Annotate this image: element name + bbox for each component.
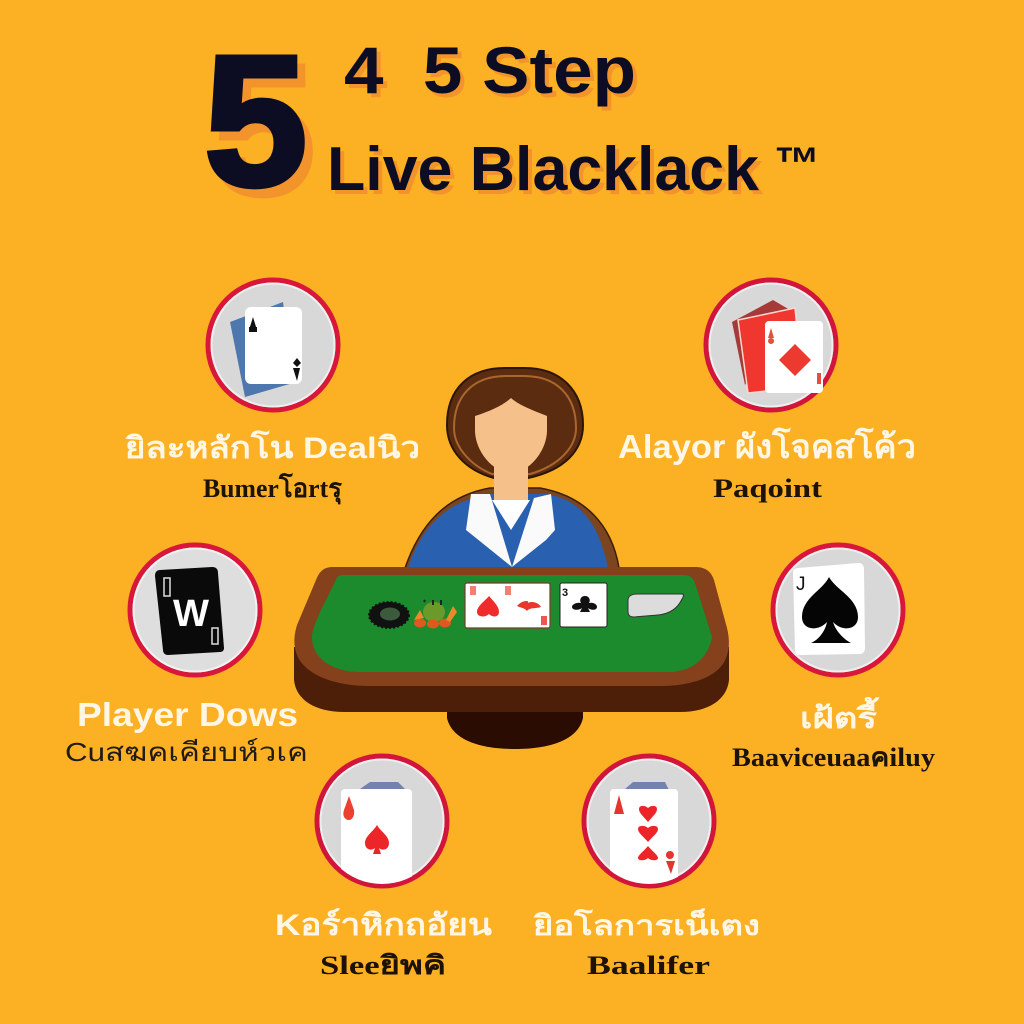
label: stand heading: Kอร์าหิกถอัยน <box>275 908 493 942</box>
two red cards <box>465 583 550 628</box>
hair <box>447 368 583 478</box>
white collar left <box>466 494 512 567</box>
white card <box>793 563 865 655</box>
step icon: hearts card <box>584 756 714 889</box>
letter J: J <box>796 574 806 595</box>
suit marks <box>249 317 301 381</box>
white glyph: W <box>173 593 209 635</box>
table top <box>294 567 729 686</box>
trademark mark: ™ <box>774 137 820 189</box>
step icon: black card <box>130 545 260 675</box>
label: dealer heading: ยิละหลักโน Dealนิว <box>125 429 420 465</box>
step icon: dealer cards <box>208 280 338 410</box>
label: draw heading: Player Dows <box>77 696 298 733</box>
corner marks <box>164 578 218 644</box>
title line: 4 5 Step: 4 5 Step <box>348 37 640 111</box>
label: bust sub text: Baaviceuaaคiluy <box>732 743 935 772</box>
title <box>204 18 820 234</box>
green felt <box>312 575 712 672</box>
neck <box>494 465 528 502</box>
label: player heading: Alayor ผังโจคสโค้ว <box>618 427 916 465</box>
back card <box>360 782 405 789</box>
card shoe <box>628 594 684 617</box>
diamond <box>779 344 811 376</box>
table side <box>294 647 729 712</box>
club card: 3 <box>562 587 568 599</box>
step icon: spade card <box>773 545 903 675</box>
dealer figure <box>405 368 619 568</box>
chair back <box>405 488 619 568</box>
black card body <box>155 567 224 655</box>
label: dealer sub text: Bumerโอrtรุ <box>203 472 342 505</box>
face <box>475 398 547 473</box>
label: draw sub text: Cuสฆคเคียบห์วเค <box>65 737 308 767</box>
chip stack <box>369 602 409 628</box>
label: payout sub text: Baalifer <box>587 951 710 980</box>
back card <box>625 782 668 789</box>
fruit-like chip pile <box>414 600 457 628</box>
big number 5: 5 <box>212 27 315 234</box>
corner marks <box>614 795 675 874</box>
three hearts <box>638 806 658 860</box>
step icon: red suit card <box>317 756 447 889</box>
red suit <box>365 825 389 854</box>
label: stand sub text: Sleeยิพคิ <box>320 951 446 980</box>
big number 5: 5 <box>204 18 307 225</box>
label: bust heading: เฝ้ตรี้ <box>800 696 880 735</box>
shirt <box>492 500 530 530</box>
title line: Live Blacklack: Live Blacklack <box>331 139 764 208</box>
label: player sub text: Paqoint <box>713 474 822 503</box>
white card <box>610 789 678 889</box>
blue card back <box>230 302 293 397</box>
corner marks <box>768 328 821 384</box>
label: payout heading: ยิอโลการเน็เตง <box>532 908 760 941</box>
club card <box>560 583 607 627</box>
corner mark <box>343 796 354 820</box>
white collar right <box>512 494 555 567</box>
dark back card <box>732 300 790 385</box>
spade <box>802 577 858 643</box>
blackjack table <box>294 567 729 749</box>
white card <box>341 789 412 889</box>
table pedestal <box>447 705 583 749</box>
step icon: player cards <box>706 280 836 410</box>
dealer jacket <box>408 494 608 568</box>
red card <box>738 308 803 393</box>
title line: 4 5 Step: 4 5 Step <box>344 33 636 107</box>
title line: Live Blacklack: Live Blacklack <box>327 135 760 204</box>
white card <box>245 307 302 384</box>
white card <box>765 321 823 393</box>
